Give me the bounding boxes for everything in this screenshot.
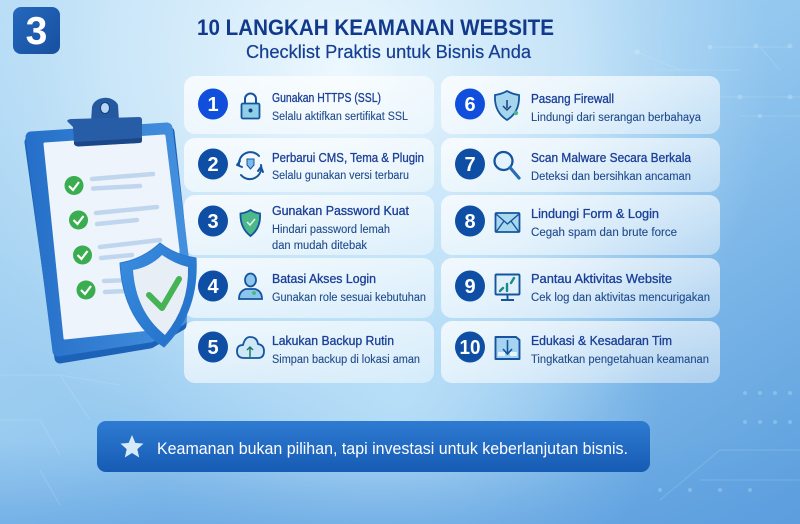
- subtitle: Checklist Praktis untuk Bisnis Anda: [246, 42, 532, 62]
- step 7: 7: [464, 154, 476, 176]
- step 1: Gunakan HTTPS (SSL): [272, 91, 381, 105]
- step 8: Cegah spam dan brute force: [531, 227, 677, 239]
- step 4: 4: [207, 276, 219, 298]
- step 1: Selalu aktifkan sertifikat SSL: [272, 111, 409, 123]
- step 7: Deteksi dan bersihkan ancaman: [531, 171, 691, 183]
- step 10: Tingkatkan pengetahuan keamanan: [531, 354, 709, 366]
- step 5: [184, 321, 434, 383]
- step 10: 10: [460, 337, 480, 359]
- step 9: 9: [464, 276, 476, 298]
- step 7: Scan Malware Secara Berkala: [531, 151, 691, 165]
- step 3: dan mudah ditebak: [272, 240, 367, 252]
- step 10: Edukasi & Kesadaran Tim: [531, 334, 672, 348]
- step 3: 3: [207, 211, 219, 233]
- callout banner: [97, 421, 650, 472]
- step 8: Lindungi Form & Login: [531, 207, 659, 221]
- step 8: [441, 195, 720, 255]
- step 6: Lindungi dari serangan berbahaya: [531, 112, 702, 124]
- step 6: [441, 76, 720, 134]
- step 2: Perbarui CMS, Tema & Plugin: [272, 151, 424, 165]
- step 2: [184, 138, 434, 192]
- step 3: Hindari password lemah: [272, 224, 390, 236]
- step 4: [184, 258, 434, 318]
- step 1: 1: [207, 94, 219, 116]
- step 4: Batasi Akses Login: [272, 272, 376, 286]
- illustration: clipboard with shield: [30, 98, 196, 358]
- step 8: 8: [464, 211, 476, 233]
- step 5: Simpan backup di lokasi aman: [272, 354, 420, 366]
- icon: star: [120, 435, 144, 458]
- panel: steps list: [184, 76, 720, 383]
- step 10: [441, 321, 720, 383]
- step 3: Gunakan Password Kuat: [272, 204, 410, 218]
- step 6: 6: [464, 94, 476, 116]
- step 9: [441, 258, 720, 318]
- step 4: Gunakan role sesuai kebutuhan: [272, 292, 426, 304]
- step 6: Pasang Firewall: [531, 92, 614, 106]
- step 2: 2: [207, 154, 219, 176]
- step 1: [184, 76, 434, 134]
- step 3: [184, 195, 434, 255]
- badge: number 3: 3: [26, 10, 47, 53]
- title: 10 LANGKAH KEAMANAN WEBSITE: [197, 15, 554, 40]
- callout text: Keamanan bukan pilihan, tapi investasi untuk keberlanjutan bisnis.: [157, 439, 628, 458]
- step 5: 5: [207, 337, 219, 359]
- step 5: Lakukan Backup Rutin: [272, 334, 394, 348]
- step 9: Pantau Aktivitas Website: [531, 272, 672, 286]
- step 2: Selalu gunakan versi terbaru: [272, 170, 409, 182]
- badge: number 3: [13, 7, 60, 54]
- step 9: Cek log dan aktivitas mencurigakan: [531, 292, 710, 304]
- step 7: [441, 138, 720, 192]
